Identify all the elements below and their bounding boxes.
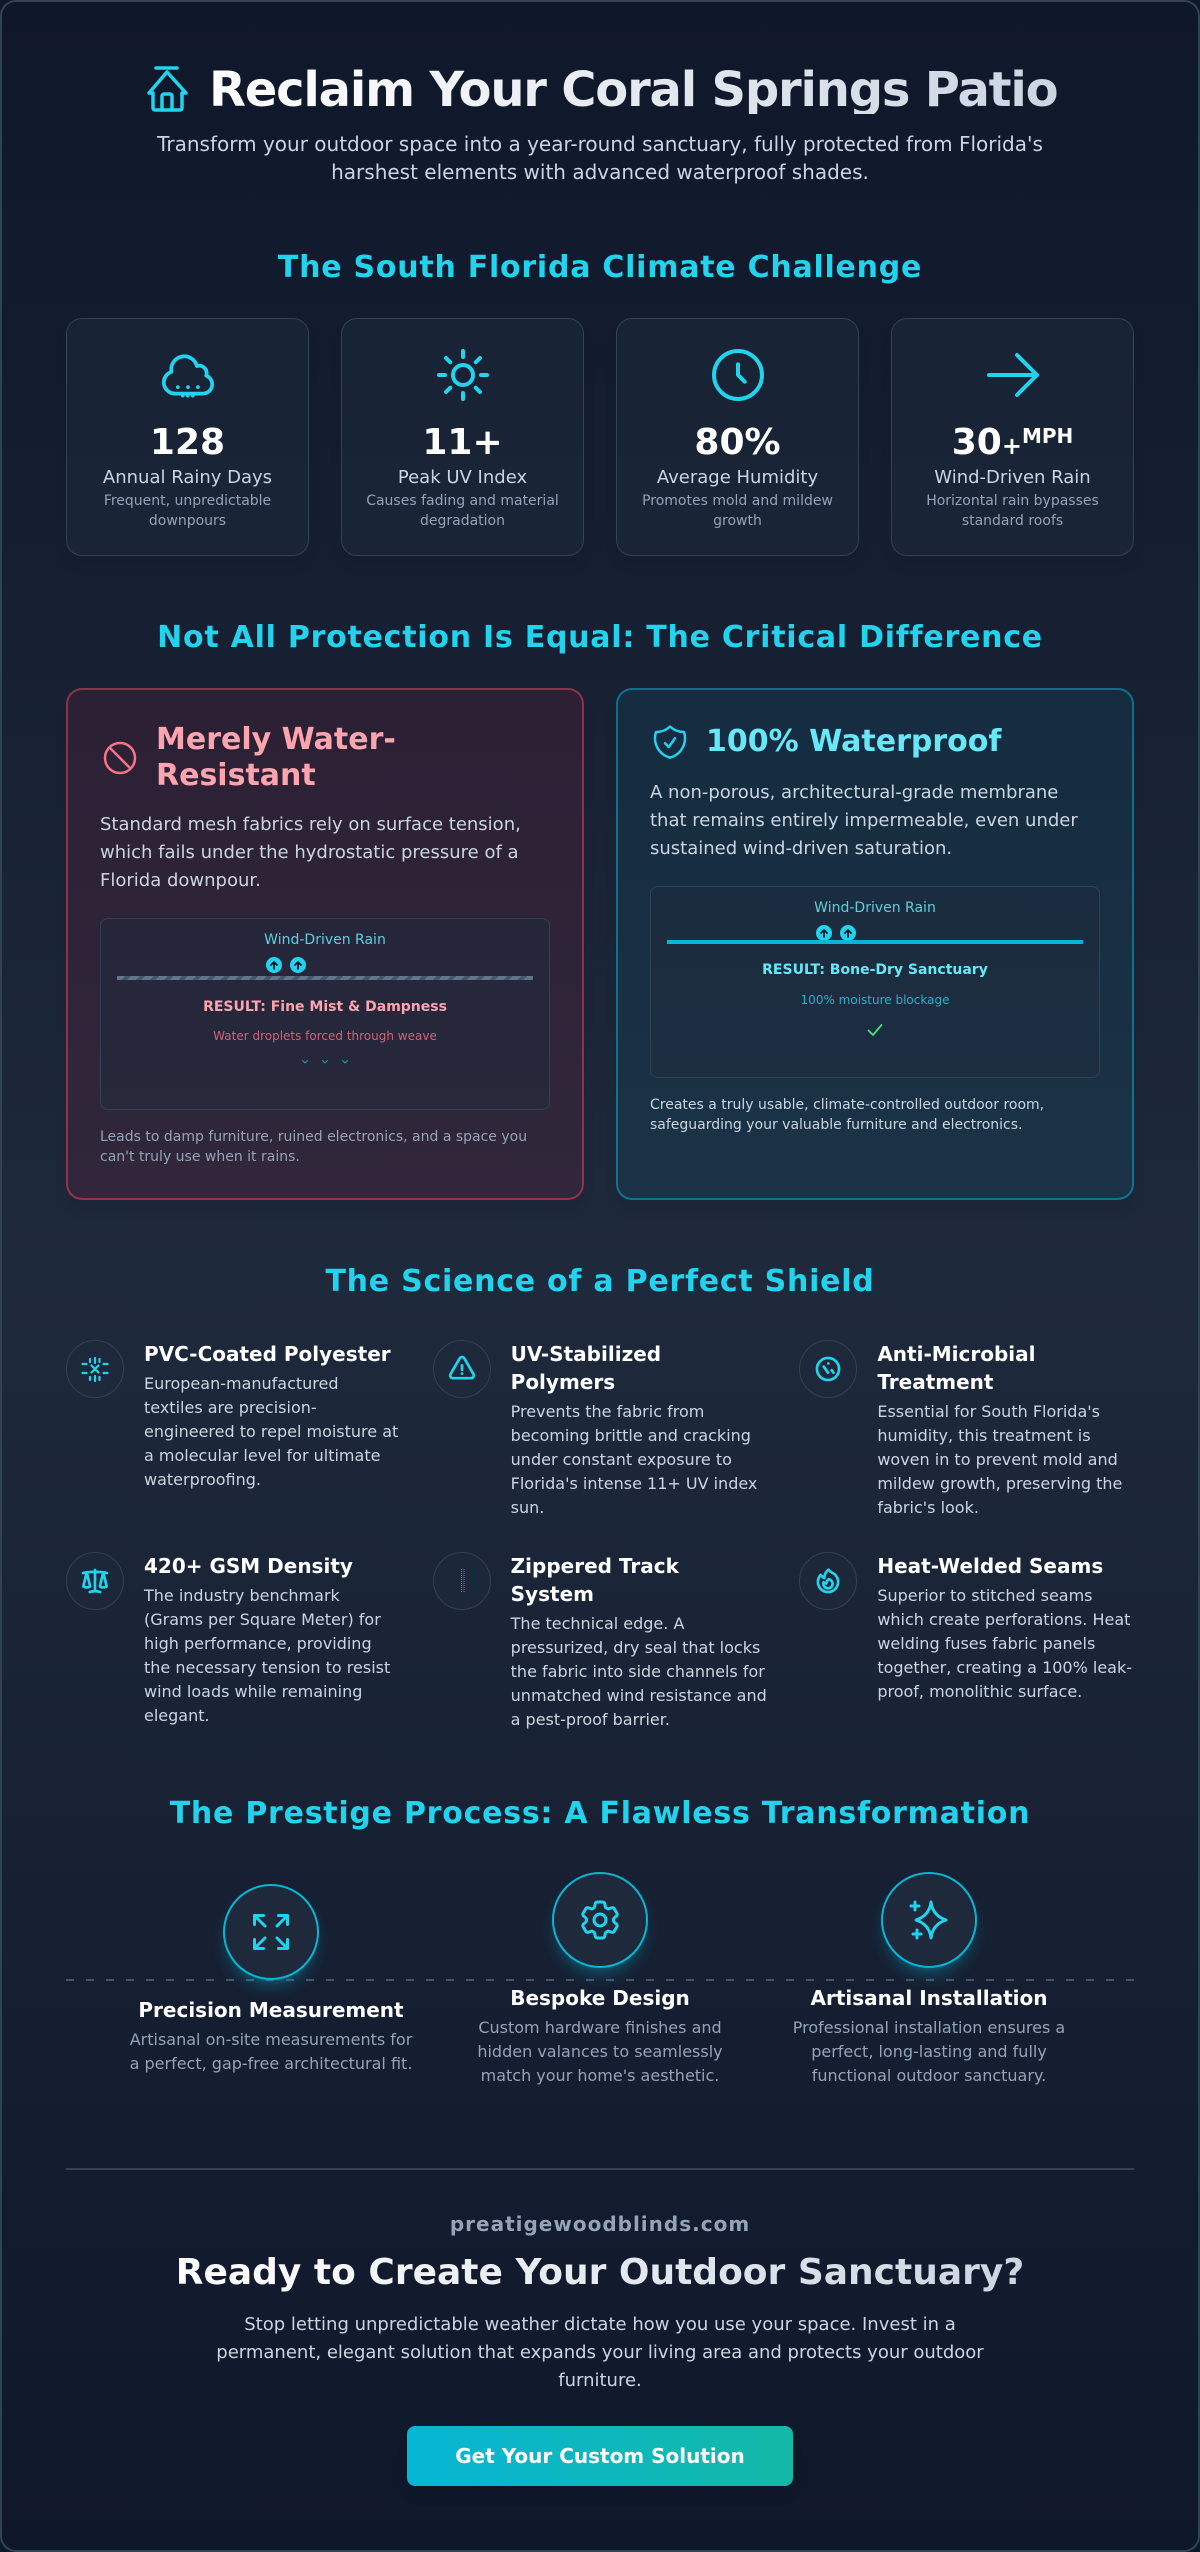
icon: rain cloud xyxy=(162,354,214,398)
stat card: UV index: Peak UV Index xyxy=(398,467,527,488)
stat card: rainy days: 128 xyxy=(150,422,225,463)
feature: GSM density xyxy=(66,1552,390,1725)
feature text: humidity, this treatment is xyxy=(877,1426,1091,1445)
result detail: Water droplets forced through weave xyxy=(213,1029,437,1043)
panel footnote: Creates a truly usable, climate-controlled outdoor room, xyxy=(650,1097,1044,1113)
feature text: under constant exposure to xyxy=(511,1450,732,1469)
heading: climate challenge: The South Florida Climate Challenge xyxy=(278,250,922,285)
feature title: Treatment xyxy=(877,1370,993,1394)
call to action xyxy=(2,2210,1198,2490)
feature title: Heat-Welded Seams xyxy=(877,1554,1103,1578)
feature text: proof, monolithic surface. xyxy=(877,1682,1082,1701)
step text xyxy=(477,2018,723,2085)
rain label: Wind-Driven Rain xyxy=(264,932,386,948)
subtitle xyxy=(157,132,1043,184)
panel: 100% waterproof xyxy=(616,688,1134,1200)
process step: installation xyxy=(793,1872,1065,2085)
feature text: (Grams per Square Meter) for xyxy=(144,1610,381,1629)
feature text: high performance, providing xyxy=(144,1634,372,1653)
icon: microbe xyxy=(799,1340,857,1398)
stat card: wind: Wind-Driven Rain xyxy=(934,467,1091,488)
panel title: 100% Waterproof xyxy=(706,724,1001,759)
step text: a perfect, gap-free architectural fit. xyxy=(130,2054,412,2073)
icon: sparkles xyxy=(881,1872,977,1968)
panel title: Resistant xyxy=(156,758,316,793)
feature text xyxy=(877,1586,1132,1701)
stat card: humidity: growth xyxy=(713,513,762,529)
stat card: UV index: 11+ xyxy=(422,422,503,463)
feature text: the necessary tension to resist xyxy=(144,1658,390,1677)
step text xyxy=(130,2030,412,2073)
mesh fabric bar xyxy=(117,976,533,980)
feature text: engineered to repel moisture at xyxy=(144,1422,398,1441)
diagram: mesh leak xyxy=(100,918,550,1110)
feature text xyxy=(510,1614,767,1729)
step text: Artisanal on-site measurements for xyxy=(130,2030,412,2049)
feature text xyxy=(877,1402,1122,1517)
leak chevrons xyxy=(302,1060,348,1064)
heading: critical difference: Not All Protection Is Equal: The Critical Difference xyxy=(157,620,1043,655)
panel description: which fails under the hydrostatic pressure of a xyxy=(100,842,519,863)
feature: zippered track xyxy=(433,1552,767,1729)
panel footnote xyxy=(650,1097,1044,1133)
CTA button xyxy=(407,2426,793,2486)
feature text: The industry benchmark xyxy=(144,1586,340,1605)
feature text: together, creating a 100% leak- xyxy=(877,1658,1132,1677)
panel description xyxy=(650,782,1078,859)
icon: gear xyxy=(552,1872,648,1968)
feature text: the fabric into side channels for xyxy=(511,1662,765,1681)
feature text xyxy=(144,1374,398,1489)
stat card: UV index: Causes fading and material xyxy=(366,493,559,509)
feature text: Superior to stitched seams xyxy=(877,1586,1093,1605)
step text: match your home's aesthetic. xyxy=(481,2066,719,2085)
feature text: The technical edge. A xyxy=(511,1614,684,1633)
panel description: sustained wind-driven saturation. xyxy=(650,838,952,859)
heading: science: The Science of a Perfect Shield xyxy=(325,1264,875,1299)
feature text: Essential for South Florida's xyxy=(877,1402,1100,1421)
diagram: membrane block xyxy=(650,886,1100,1078)
membrane bar xyxy=(667,940,1083,944)
stat card: rainy days xyxy=(66,318,309,556)
CTA text: furniture. xyxy=(558,2370,642,2391)
panel description: Standard mesh fabrics rely on surface tension, xyxy=(100,814,521,835)
feature title: Zippered Track xyxy=(511,1554,679,1578)
stat card: UV index: degradation xyxy=(420,513,505,529)
icon: zipper track xyxy=(433,1552,491,1610)
CTA text: Stop letting unpredictable weather dictate how you use your space. Invest in a xyxy=(244,2314,956,2335)
feature text xyxy=(511,1402,757,1517)
feature text: a molecular level for ultimate xyxy=(144,1446,380,1465)
feature text: sun. xyxy=(511,1498,544,1517)
icon: clock xyxy=(712,349,764,401)
result detail: 100% moisture blockage xyxy=(801,993,949,1007)
feature title: Anti-Microbial xyxy=(877,1342,1036,1366)
stat card: humidity: Average Humidity xyxy=(657,467,818,488)
heading: process: The Prestige Process: A Flawless Transformation xyxy=(170,1796,1030,1831)
panel: merely water-resistant xyxy=(66,688,584,1200)
panel title xyxy=(156,722,396,793)
feature text: waterproofing. xyxy=(144,1470,261,1489)
rain droplets xyxy=(266,957,306,973)
feature title: UV-Stabilized xyxy=(511,1342,661,1366)
panel description xyxy=(100,814,521,891)
step text: hidden valances to seamlessly xyxy=(477,2042,723,2061)
icon: expand arrows xyxy=(223,1884,319,1980)
step text: perfect, long-lasting and fully xyxy=(811,2042,1047,2061)
feature text: unmatched wind resistance and xyxy=(511,1686,767,1705)
stat card: rainy days: Frequent, unpredictable xyxy=(104,493,271,509)
dashed process timeline xyxy=(66,1979,1134,1981)
feature title xyxy=(511,1342,661,1394)
feature text xyxy=(144,1586,390,1725)
feature title: PVC-Coated Polyester xyxy=(144,1342,391,1366)
feature title: System xyxy=(511,1582,594,1606)
CTA button: Get Your Custom Solution xyxy=(455,2444,745,2468)
feature text: woven in to prevent mold and xyxy=(877,1450,1118,1469)
feature title xyxy=(877,1342,1036,1394)
process step: measurement xyxy=(130,1884,412,2073)
icon: arrow xyxy=(987,352,1040,398)
icon: ban xyxy=(104,742,136,774)
icon: weave xyxy=(66,1340,124,1398)
feature text: elegant. xyxy=(144,1706,210,1725)
process step: design xyxy=(477,1872,723,2085)
feature title: 420+ GSM Density xyxy=(144,1554,353,1578)
stat card: UV index xyxy=(341,318,584,556)
CTA text xyxy=(2,2311,1198,2395)
feature text: pressurized, dry seal that locks xyxy=(511,1638,760,1657)
stat card: wind: standard roofs xyxy=(962,513,1063,529)
step text: functional outdoor sanctuary. xyxy=(812,2066,1046,2085)
panel description: A non-porous, architectural-grade membrane xyxy=(650,782,1058,803)
step text: Professional installation ensures a xyxy=(793,2018,1065,2037)
step title: Artisanal Installation xyxy=(811,1986,1047,2010)
feature text: European-manufactured xyxy=(144,1374,339,1393)
stat card: humidity xyxy=(616,318,859,556)
icon: house xyxy=(147,66,188,112)
icon: sun xyxy=(437,349,489,401)
icon: check xyxy=(868,1024,882,1036)
result label: RESULT: Bone-Dry Sanctuary xyxy=(762,962,988,978)
stat card: rainy days: Annual Rainy Days xyxy=(103,467,272,488)
icon: shield check xyxy=(654,725,686,759)
feature text: textiles are precision- xyxy=(144,1398,317,1417)
step title: Bespoke Design xyxy=(510,1986,690,2010)
stat card: humidity: Promotes mold and mildew xyxy=(642,493,833,509)
rain label: Wind-Driven Rain xyxy=(814,900,936,916)
stat card: rainy days: downpours xyxy=(149,513,226,529)
stat card: wind: Horizontal rain bypasses xyxy=(926,493,1099,509)
feature text: Prevents the fabric from xyxy=(511,1402,704,1421)
panel description: Florida downpour. xyxy=(100,870,261,891)
panel footnote: Leads to damp furniture, ruined electronics, and a space you xyxy=(100,1129,527,1145)
stat card: wind: 30+MPH xyxy=(952,422,1073,463)
icon: warning xyxy=(433,1340,491,1398)
feature: anti-microbial treatment xyxy=(799,1340,1122,1517)
feature: PVC-coated polyester xyxy=(66,1340,398,1489)
feature text: becoming brittle and cracking xyxy=(511,1426,751,1445)
step text xyxy=(793,2018,1065,2085)
panel description: that remains entirely impermeable, even under xyxy=(650,810,1078,831)
icon: scale xyxy=(66,1552,124,1610)
panel title: Merely Water- xyxy=(156,722,396,757)
feature text: Florida's intense 11+ UV index xyxy=(511,1474,757,1493)
title: Reclaim Your Coral Springs Patio xyxy=(209,62,1057,118)
feature text: fabric's look. xyxy=(877,1498,979,1517)
feature text: wind loads while remaining xyxy=(144,1682,362,1701)
subtitle: Transform your outdoor space into a year-round sanctuary, fully protected from Florida's xyxy=(157,132,1043,156)
feature title: Polymers xyxy=(511,1370,615,1394)
panel footnote: can't truly use when it rains. xyxy=(100,1149,300,1165)
feature text: mildew growth, preserving the xyxy=(877,1474,1122,1493)
panel footnote: safeguarding your valuable furniture and electronics. xyxy=(650,1117,1022,1133)
feature text: which create perforations. Heat xyxy=(877,1610,1130,1629)
rain droplets xyxy=(816,925,856,940)
step text: Custom hardware finishes and xyxy=(478,2018,722,2037)
feature: UV-stabilized polymers xyxy=(433,1340,757,1517)
feature title xyxy=(511,1554,680,1606)
panel footnote xyxy=(100,1129,527,1165)
result label: RESULT: Fine Mist & Dampness xyxy=(203,999,447,1015)
website: preatigewoodblinds.com xyxy=(450,2212,750,2236)
stat card: wind xyxy=(891,318,1134,556)
subtitle: harshest elements with advanced waterproof shades. xyxy=(331,160,869,184)
CTA text: permanent, elegant solution that expands your living area and protects your outdoor xyxy=(216,2342,984,2363)
CTA heading: Ready to Create Your Outdoor Sanctuary? xyxy=(176,2252,1024,2293)
header xyxy=(147,62,1057,184)
icon: flame xyxy=(799,1552,857,1610)
feature: heat-welded seams xyxy=(799,1552,1132,1701)
feature text: welding fuses fabric panels xyxy=(877,1634,1095,1653)
step title: Precision Measurement xyxy=(138,1998,404,2022)
stat card: humidity: 80% xyxy=(694,422,781,463)
feature text: a pest-proof barrier. xyxy=(511,1710,670,1729)
